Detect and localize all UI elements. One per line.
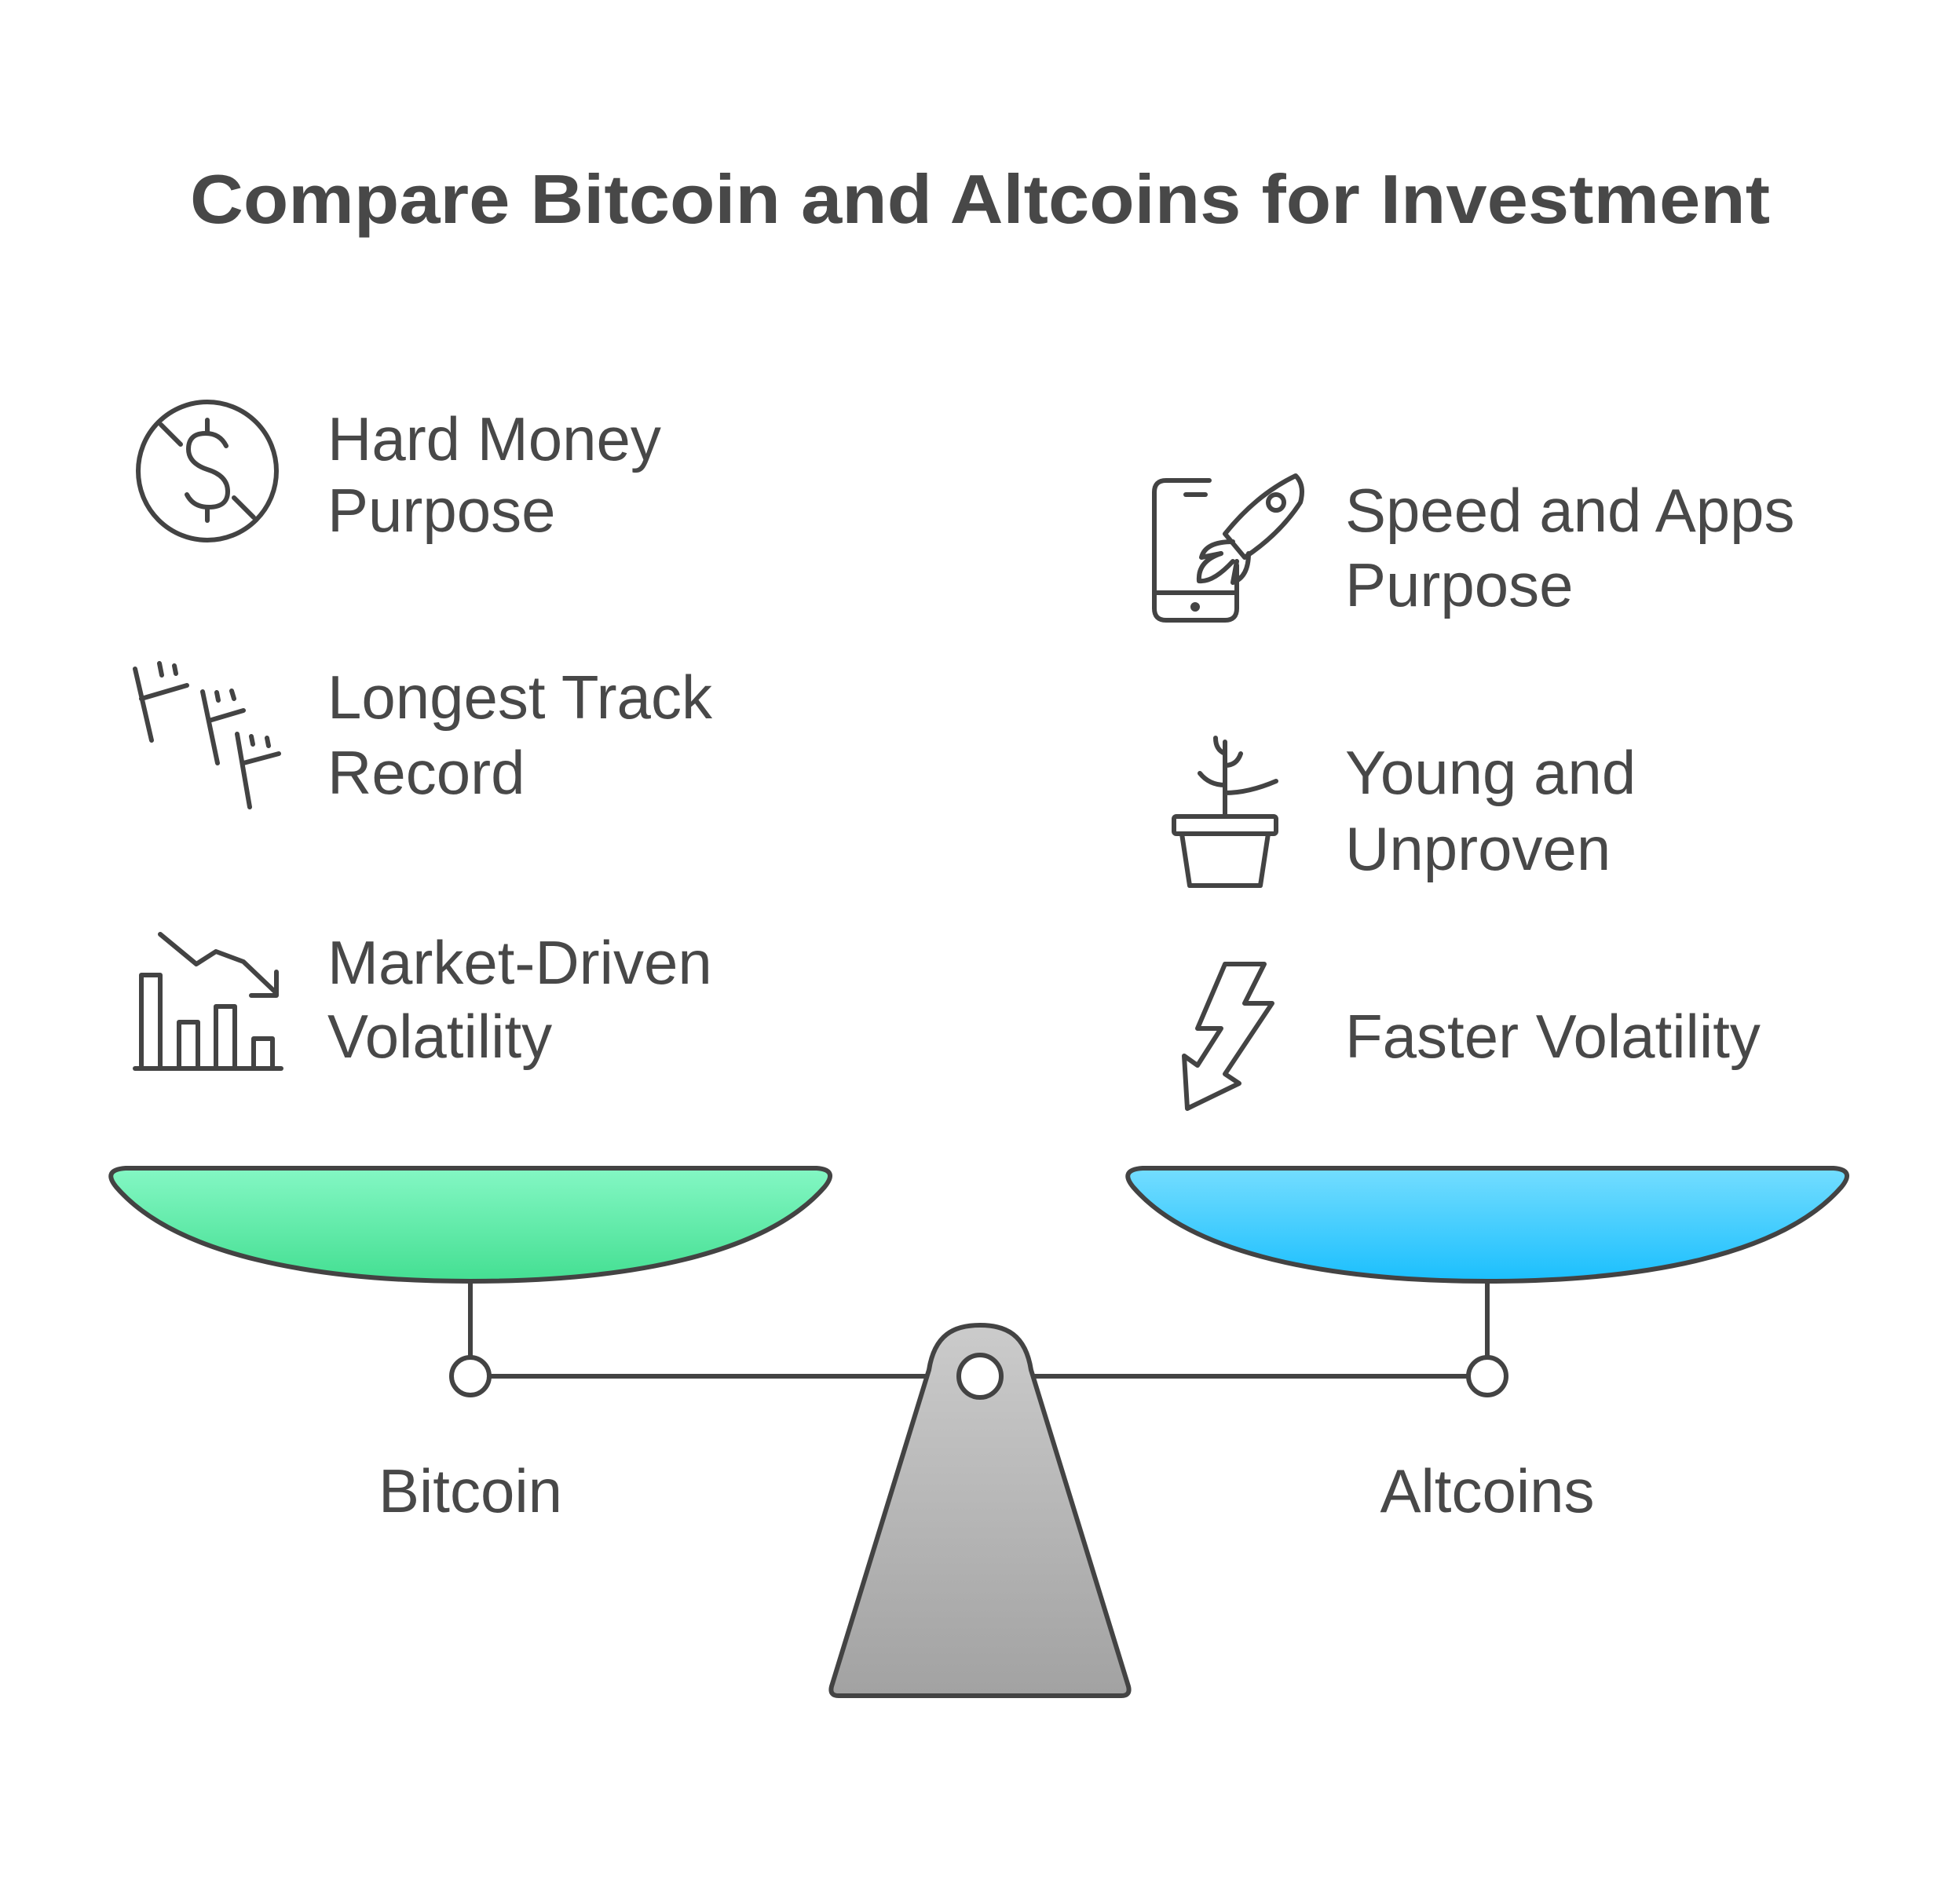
right item: faster volatility: [1184, 964, 1761, 1109]
right item: speed and apps: [1154, 476, 1795, 620]
left item: longest track record: Record: [327, 738, 525, 807]
icon: footprints: [135, 663, 279, 807]
right item: faster volatility: Faster Volatility: [1345, 1002, 1761, 1071]
left item: market-driven volatility: Market-Driven: [327, 928, 712, 997]
pan: altcoins: [1128, 1168, 1847, 1281]
right item: young and unproven: Unproven: [1345, 814, 1611, 883]
left item: market-driven volatility: Volatility: [327, 1002, 552, 1071]
right item: young and unproven: Young and: [1345, 738, 1636, 807]
left item: longest track record: Longest Track: [327, 663, 713, 732]
icon: dollar circle: [138, 402, 276, 540]
beam: [470, 1374, 1487, 1379]
right item: speed and apps: Speed and Apps: [1345, 476, 1795, 545]
icon: lightning arrow: [1184, 964, 1272, 1109]
left item: hard money: [138, 402, 661, 545]
left item: market-driven volatility: [135, 928, 712, 1071]
right item: speed and apps: Purpose: [1345, 550, 1574, 619]
fulcrum: [831, 1325, 1129, 1696]
left item: longest track record: [135, 663, 713, 807]
title: Compare Bitcoin and Altcoins for Investment: [190, 160, 1770, 238]
icon: sprout in pot: [1174, 738, 1276, 886]
pan: bitcoin: [111, 1168, 830, 1281]
icon: falling bar chart: [135, 934, 281, 1068]
label: altcoins: Altcoins: [1380, 1456, 1595, 1525]
scale: [111, 1168, 1847, 1696]
left item: hard money: Purpose: [327, 476, 556, 545]
icon: phone with rocket: [1154, 476, 1302, 620]
left item: hard money: Hard Money: [327, 404, 661, 473]
label: bitcoin: Bitcoin: [378, 1456, 562, 1525]
right item: young and unproven: [1174, 738, 1636, 886]
